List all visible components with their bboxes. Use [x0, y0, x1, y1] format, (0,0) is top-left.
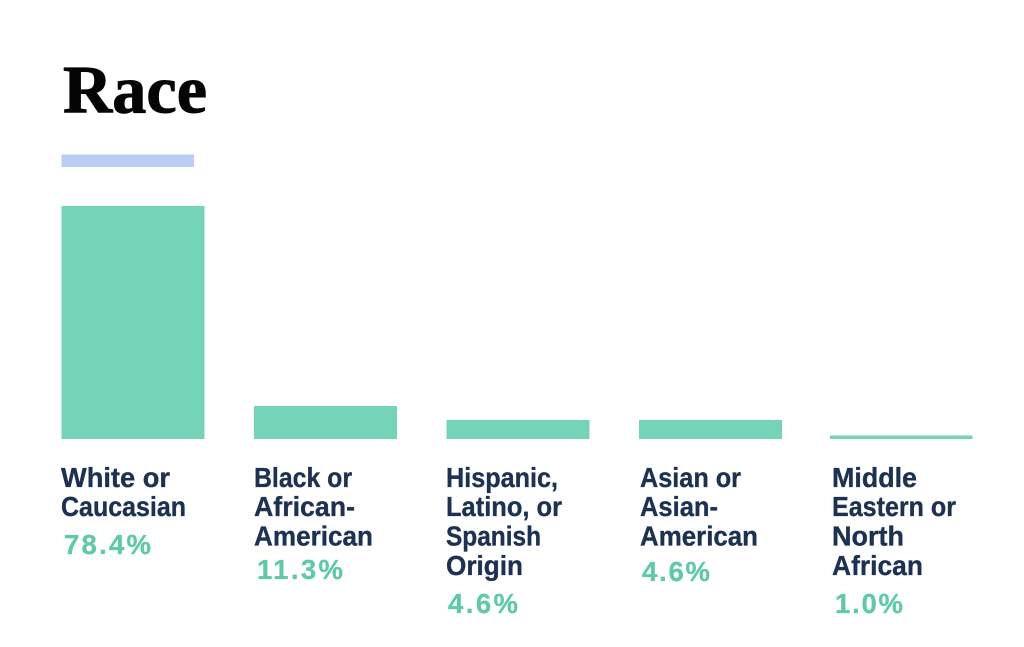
value: 1.0%: 1.0% [835, 588, 903, 619]
label: Black or African-American: African- [254, 491, 355, 522]
bar: Hispanic, Latino, or Spanish Origin [446, 420, 590, 439]
column: Hispanic, Latino, or Spanish Origin [446, 420, 590, 619]
label: Middle Eastern or North African [832, 462, 956, 581]
label: Middle Eastern or North African: Middle [832, 462, 917, 493]
label: White or Caucasian: White or [61, 462, 170, 493]
bar: Asian or Asian-American [639, 420, 782, 439]
label: Hispanic, Latino, or Spanish Origin: Origin [446, 550, 523, 581]
value: 4.6%: 4.6% [642, 556, 710, 587]
label: Asian or Asian-American: American [640, 520, 758, 552]
label: Middle Eastern or North African: Eastern or [832, 491, 956, 522]
column: Middle Eastern or North African [830, 436, 972, 619]
label: Black or African-American [254, 462, 373, 552]
column: White or Caucasian [61, 206, 204, 560]
label: Hispanic, Latino, or Spanish Origin [446, 462, 562, 581]
label: Black or African-American: American [254, 520, 373, 552]
label: Middle Eastern or North African: African [832, 550, 923, 581]
label: Asian or Asian-American: Asian or [640, 462, 741, 493]
label: Asian or Asian-American: Asian- [640, 491, 718, 522]
label: Middle Eastern or North African: North [832, 520, 904, 552]
bar chart [61, 206, 972, 619]
bar: Middle Eastern or North African [830, 436, 972, 439]
label: White or Caucasian: Caucasian [61, 491, 186, 522]
value: 11.3%: 11.3% [257, 554, 343, 585]
label: White or Caucasian [61, 462, 186, 522]
label: Hispanic, Latino, or Spanish Origin: Spanish [446, 520, 541, 552]
column: Black or African-American [254, 406, 397, 585]
label: Hispanic, Latino, or Spanish Origin: Latino, or [446, 491, 562, 522]
bar: Black or African-American [254, 406, 397, 439]
label: Hispanic, Latino, or Spanish Origin: Hispanic, [446, 462, 558, 493]
bar: White or Caucasian [62, 206, 204, 439]
column: Asian or Asian-American [639, 420, 782, 587]
label: Asian or Asian-American [640, 462, 758, 552]
value: 78.4%: 78.4% [64, 529, 151, 560]
value: 4.6%: 4.6% [448, 588, 518, 619]
title: Race [63, 52, 207, 128]
label: Black or African-American: Black or [254, 462, 352, 493]
accent bar under title [62, 154, 194, 167]
